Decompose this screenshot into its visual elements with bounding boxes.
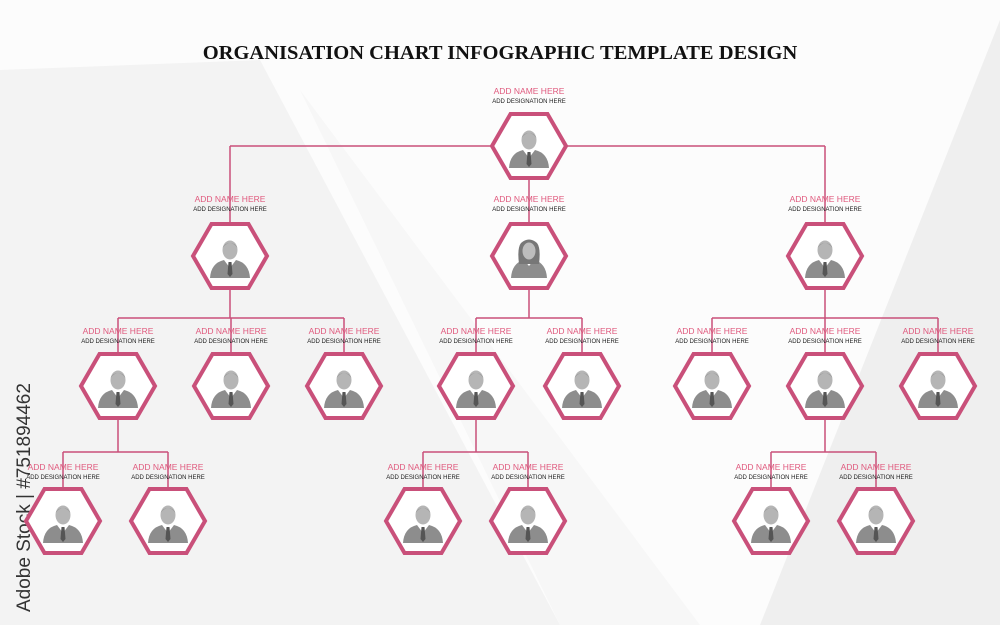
node: L4 4: ADD NAME HERE — [493, 462, 564, 472]
node: L2 right: ADD NAME HERE — [790, 194, 861, 204]
node: L4 4: ADD DESIGNATION HERE — [491, 475, 565, 481]
node: L4 6: ADD DESIGNATION HERE — [839, 475, 913, 481]
node: L2 left: ADD NAME HERE — [195, 194, 266, 204]
node: L4 1 — [26, 462, 100, 553]
node: L2 right — [788, 194, 862, 288]
node: L4 1: ADD DESIGNATION HERE — [26, 475, 100, 481]
node: L4 3: ADD DESIGNATION HERE — [386, 475, 460, 481]
node: L2 right: ADD DESIGNATION HERE — [788, 207, 862, 213]
node: L2 left: ADD DESIGNATION HERE — [193, 207, 267, 213]
watermark: Adobe Stock | #751894462 — [14, 383, 35, 612]
node: L3 4: ADD DESIGNATION HERE — [439, 339, 513, 345]
node: L3 8: ADD NAME HERE — [903, 326, 974, 336]
node: L2 left — [193, 194, 267, 288]
node: L3 3: ADD NAME HERE — [309, 326, 380, 336]
node: L4 2: ADD DESIGNATION HERE — [131, 475, 205, 481]
node: L3 7 — [788, 326, 862, 418]
node: L3 2 — [194, 326, 268, 418]
node: L4 5 — [734, 462, 808, 553]
connector lines — [63, 146, 938, 490]
node: L4 5: ADD NAME HERE — [736, 462, 807, 472]
title: ORGANISATION CHART INFOGRAPHIC TEMPLATE DESIGN — [203, 42, 798, 64]
node: L3 6: ADD NAME HERE — [677, 326, 748, 336]
node: L3 1: ADD DESIGNATION HERE — [81, 339, 155, 345]
node: top — [492, 86, 566, 178]
node: L3 4: ADD NAME HERE — [441, 326, 512, 336]
node: L3 5: ADD DESIGNATION HERE — [545, 339, 619, 345]
node: L3 7: ADD DESIGNATION HERE — [788, 339, 862, 345]
node: L3 6 — [675, 326, 749, 418]
node: L4 5: ADD DESIGNATION HERE — [734, 475, 808, 481]
node: L4 6 — [839, 462, 913, 553]
node: L3 5 — [545, 326, 619, 418]
node: L3 7: ADD NAME HERE — [790, 326, 861, 336]
node: L3 4 — [439, 326, 513, 418]
node: top: ADD DESIGNATION HERE — [492, 99, 566, 105]
nodes — [26, 86, 975, 553]
node: L3 1: ADD NAME HERE — [83, 326, 154, 336]
node: L4 2 — [131, 462, 205, 553]
node: top: ADD NAME HERE — [494, 86, 565, 96]
node: L4 2: ADD NAME HERE — [133, 462, 204, 472]
node: L4 3: ADD NAME HERE — [388, 462, 459, 472]
node: L3 1 — [81, 326, 155, 418]
node: L3 2: ADD DESIGNATION HERE — [194, 339, 268, 345]
node: L2 middle: ADD DESIGNATION HERE — [492, 207, 566, 213]
node: L3 8 — [901, 326, 975, 418]
node: L4 6: ADD NAME HERE — [841, 462, 912, 472]
node: L3 6: ADD DESIGNATION HERE — [675, 339, 749, 345]
node: L3 3: ADD DESIGNATION HERE — [307, 339, 381, 345]
node: L3 2: ADD NAME HERE — [196, 326, 267, 336]
node: L4 1: ADD NAME HERE — [28, 462, 99, 472]
node: L3 5: ADD NAME HERE — [547, 326, 618, 336]
node: L3 3 — [307, 326, 381, 418]
node: L4 3 — [386, 462, 460, 553]
node: L2 middle: ADD NAME HERE — [494, 194, 565, 204]
node: L4 4 — [491, 462, 565, 553]
node: L3 8: ADD DESIGNATION HERE — [901, 339, 975, 345]
node: L2 middle — [492, 194, 566, 288]
